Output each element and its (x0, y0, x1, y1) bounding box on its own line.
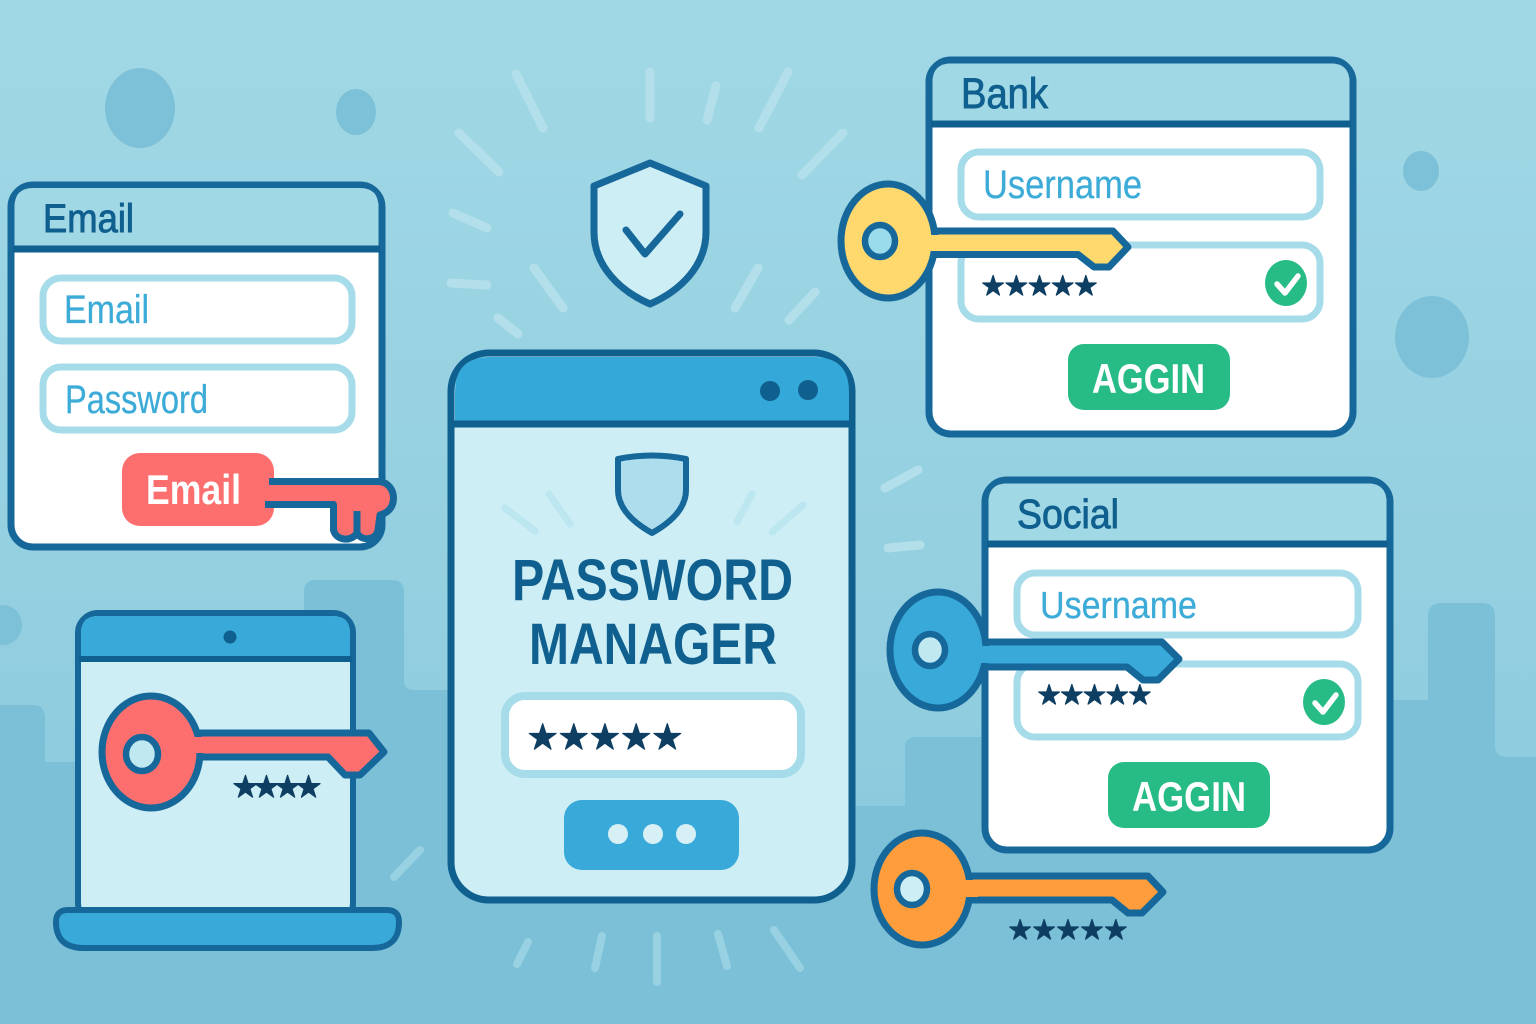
password field: Password (65, 378, 208, 422)
red email key with button head (122, 453, 394, 539)
email window header (14, 188, 378, 249)
username field: Username (983, 163, 1142, 207)
social login button (1108, 762, 1270, 828)
icon: green check (1303, 679, 1345, 725)
title (512, 548, 793, 677)
inner rays (505, 494, 803, 532)
central window header (455, 357, 849, 423)
master password field (505, 696, 801, 774)
laptop password stars: ★★★★ (232, 771, 322, 804)
email field (43, 278, 352, 341)
button with dots (564, 800, 739, 870)
password field (43, 367, 352, 430)
title: MANAGER (529, 612, 777, 677)
password field: ★★★★★ (981, 271, 1098, 301)
title: PASSWORD (512, 548, 793, 613)
icon: orange key (874, 833, 1163, 945)
email window title: Email (43, 197, 134, 241)
icon: blue key (890, 592, 1179, 708)
password field (961, 245, 1320, 319)
panel: social login window (985, 480, 1390, 850)
orange key stars: ★★★★★ (1008, 915, 1128, 945)
bank login button: AGGIN (1092, 355, 1205, 402)
panel: central password manager window (451, 353, 852, 900)
icon: inner shield (618, 456, 686, 533)
master password field: ★★★★★ (527, 718, 683, 757)
rays around shield (451, 72, 920, 548)
icon: top shield with check (594, 163, 706, 304)
password field (1017, 664, 1358, 737)
social window header (988, 484, 1386, 544)
icon: yellow key (841, 184, 1128, 298)
laptop top bar (81, 616, 350, 659)
bank window title: Bank (961, 70, 1048, 118)
password field: ★★★★★ (1037, 680, 1152, 710)
bank login button (1068, 344, 1230, 410)
laptop base (56, 910, 399, 948)
panel: email login window (11, 185, 382, 547)
social login button: AGGIN (1132, 773, 1246, 820)
rays below central window (394, 850, 800, 982)
red email key with button head: Email (146, 466, 241, 513)
email field: Email (64, 288, 149, 332)
icon: red key (102, 696, 384, 808)
background skyline (0, 580, 1536, 1024)
username field: Username (1040, 585, 1197, 627)
panel: bank login window (929, 60, 1353, 434)
username field (961, 152, 1320, 217)
icon: green check (1265, 260, 1307, 306)
username field (1017, 573, 1358, 635)
bank window header (932, 64, 1350, 124)
background dots (0, 68, 1469, 645)
social window title: Social (1017, 491, 1119, 537)
panel: laptop (56, 613, 399, 948)
